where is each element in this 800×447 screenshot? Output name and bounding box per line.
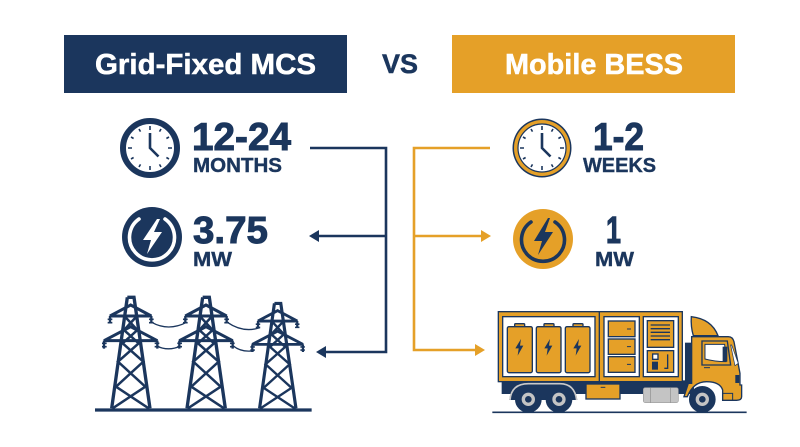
batteries <box>507 324 590 373</box>
icon: orange power bolt <box>513 209 573 269</box>
text: 1 MW: 1 <box>606 210 621 252</box>
vent panel <box>647 321 674 347</box>
cab <box>686 343 692 382</box>
pylon 1 <box>102 297 159 408</box>
arrows: orange connector <box>414 148 491 356</box>
pylon 3 <box>250 303 305 408</box>
chassis <box>502 381 693 393</box>
heading: Mobile BESS <box>452 35 735 93</box>
icon: navy power bolt <box>122 207 182 267</box>
drawers <box>608 321 635 372</box>
text: 12-24 months: 12-24 <box>192 116 291 159</box>
fender and rear wheels <box>509 383 577 400</box>
text: 1-2 weeks: 1-2 <box>593 116 644 159</box>
text: 3.75 MW: 3.75 <box>193 210 268 252</box>
front wheel <box>690 387 715 412</box>
text: 1 MW: MW <box>595 249 634 271</box>
tank <box>643 388 678 403</box>
arrows: navy connector <box>309 148 386 358</box>
control panel <box>647 351 674 372</box>
pylon 2 <box>177 297 235 408</box>
text: 1 MW <box>595 210 634 271</box>
heading: Grid-Fixed MCS: Grid-Fixed MCS <box>95 49 316 81</box>
heading: VS: VS <box>382 49 418 79</box>
icon: transmission pylons <box>95 297 312 410</box>
icon: orange clock <box>512 118 572 178</box>
icon: battery truck <box>492 312 747 412</box>
toolbox <box>586 384 620 399</box>
text: 12-24 months: MONTHS <box>193 155 282 177</box>
wires <box>152 322 260 351</box>
heading: Mobile BESS: Mobile BESS <box>505 49 683 81</box>
text: 1-2 weeks: WEEKS <box>583 155 656 177</box>
text: 3.75 MW: MW <box>193 249 232 271</box>
icon: navy clock <box>123 121 177 175</box>
text: 1-2 weeks <box>583 116 656 177</box>
text: 3.75 MW <box>193 210 268 271</box>
cargo box <box>498 312 682 382</box>
heading: Grid-Fixed MCS <box>64 35 347 93</box>
